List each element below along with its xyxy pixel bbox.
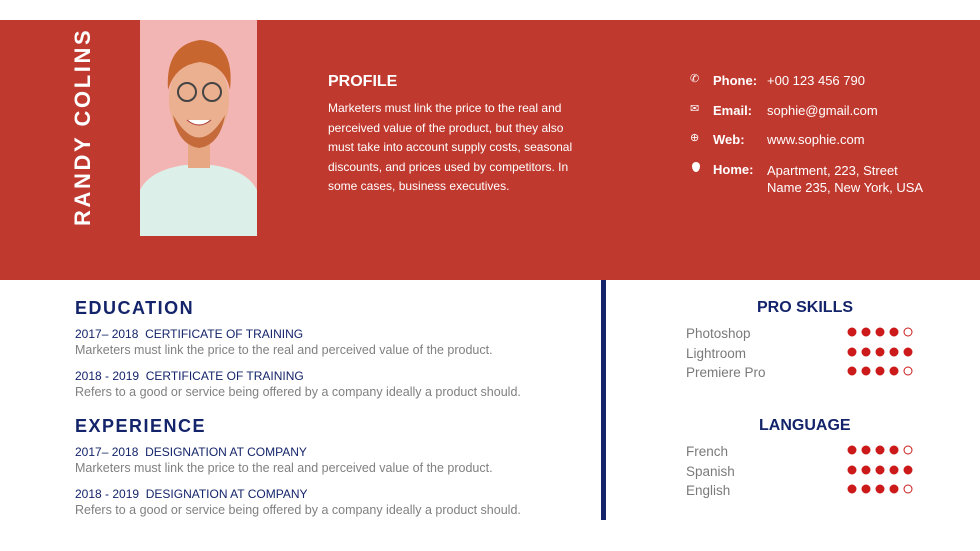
language: LANGUAGE bbox=[759, 417, 851, 434]
divider bbox=[601, 280, 606, 520]
education: 2017– 2018 CERTIFICATE OF TRAINING bbox=[75, 327, 303, 341]
contact: Phone: bbox=[713, 73, 757, 88]
education: Marketers must link the price to the real and perceived value of the product. bbox=[75, 343, 493, 357]
contact: Email: bbox=[713, 103, 752, 118]
experience: 2017– 2018 DESIGNATION AT COMPANY bbox=[75, 445, 307, 459]
contact: Home: bbox=[713, 162, 753, 177]
language bbox=[686, 417, 912, 498]
header band bbox=[0, 20, 980, 280]
contact: Name 235, New York, USA bbox=[767, 180, 923, 195]
contact: Web: bbox=[713, 132, 745, 147]
profile: PROFILE bbox=[328, 73, 397, 90]
pro skills: Lightroom bbox=[686, 346, 746, 361]
language: French bbox=[686, 444, 728, 459]
profile: Marketers must link the price to the real and perceived value of the product, but they also must take into account supply costs, seasonal discounts, and prices used by competitors. In some cases, business executives. bbox=[328, 101, 572, 193]
experience: EXPERIENCE bbox=[75, 416, 206, 436]
language: Spanish bbox=[686, 464, 735, 479]
pro skills bbox=[686, 299, 912, 380]
icon: web: ⊕ bbox=[690, 132, 699, 144]
contact: +00 123 456 790 bbox=[767, 73, 865, 88]
contact: Apartment, 223, Street bbox=[767, 163, 898, 178]
contact bbox=[690, 73, 923, 195]
pro skills: PRO SKILLS bbox=[757, 299, 853, 316]
contact: sophie@gmail.com bbox=[767, 103, 878, 118]
experience: 2018 - 2019 DESIGNATION AT COMPANY bbox=[75, 487, 308, 501]
education: 2018 - 2019 CERTIFICATE OF TRAINING bbox=[75, 369, 304, 383]
icon: home bbox=[692, 162, 700, 172]
experience: Marketers must link the price to the real and perceived value of the product. bbox=[75, 461, 493, 475]
name vertical: RANDY COLINS bbox=[70, 28, 95, 226]
language: English bbox=[686, 483, 730, 498]
icon: email: ✉ bbox=[690, 103, 699, 115]
education: Refers to a good or service being offered by a company ideally a product should. bbox=[75, 385, 521, 399]
icon: phone: ✆ bbox=[690, 73, 699, 85]
experience: Refers to a good or service being offered by a company ideally a product should. bbox=[75, 503, 521, 517]
contact: www.sophie.com bbox=[767, 132, 865, 147]
education bbox=[75, 298, 521, 399]
experience bbox=[75, 416, 521, 517]
photo bbox=[140, 20, 257, 236]
education: EDUCATION bbox=[75, 298, 194, 318]
pro skills: Premiere Pro bbox=[686, 365, 766, 380]
pro skills: Photoshop bbox=[686, 326, 751, 341]
